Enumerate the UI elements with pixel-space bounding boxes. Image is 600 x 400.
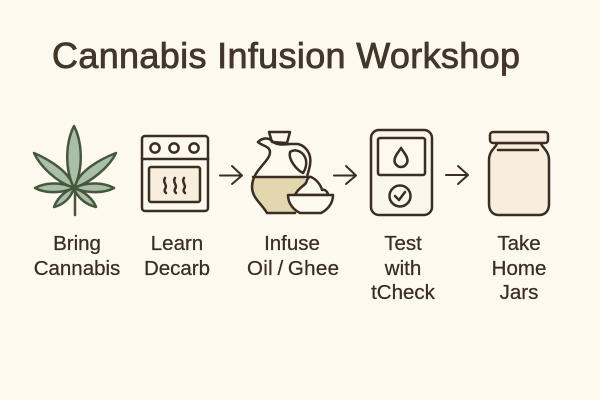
label: Learn Decarb: Learn [151,232,203,255]
icon: oven [142,136,208,211]
label: Test with tCheck: with [384,257,421,280]
label: Take Home Jars: Home [492,257,546,280]
label: Bring Cannabis: Cannabis [34,257,120,280]
icon: tCheck tester [371,130,432,215]
label: Test with tCheck: Test [384,232,422,255]
arrow: jug to tester [334,166,356,184]
label: Learn Decarb [144,232,210,280]
icon: jar [489,132,549,215]
label: Test with tCheck [371,232,436,304]
label: Bring Cannabis: Bring [53,232,101,255]
label: Learn Decarb: Decarb [144,257,210,280]
icon: jug of oil with bowl of ghee [252,132,333,213]
title: Cannabis Infusion Workshop [52,35,520,76]
label: Take Home Jars: Jars [500,281,538,304]
label: Infuse Oil / Ghee: Oil / Ghee [247,257,339,280]
label: Test with tCheck: tCheck [371,281,436,304]
label: Bring Cannabis [34,232,120,280]
label: Take Home Jars [492,232,546,304]
arrow: oven to jug [220,166,242,184]
arrow: tester to jar [446,166,468,184]
label: Infuse Oil / Ghee: Infuse [264,232,320,255]
label: Take Home Jars: Take [497,232,541,255]
icon: cannabis leaf [34,126,116,215]
label: Infuse Oil / Ghee [247,232,339,280]
